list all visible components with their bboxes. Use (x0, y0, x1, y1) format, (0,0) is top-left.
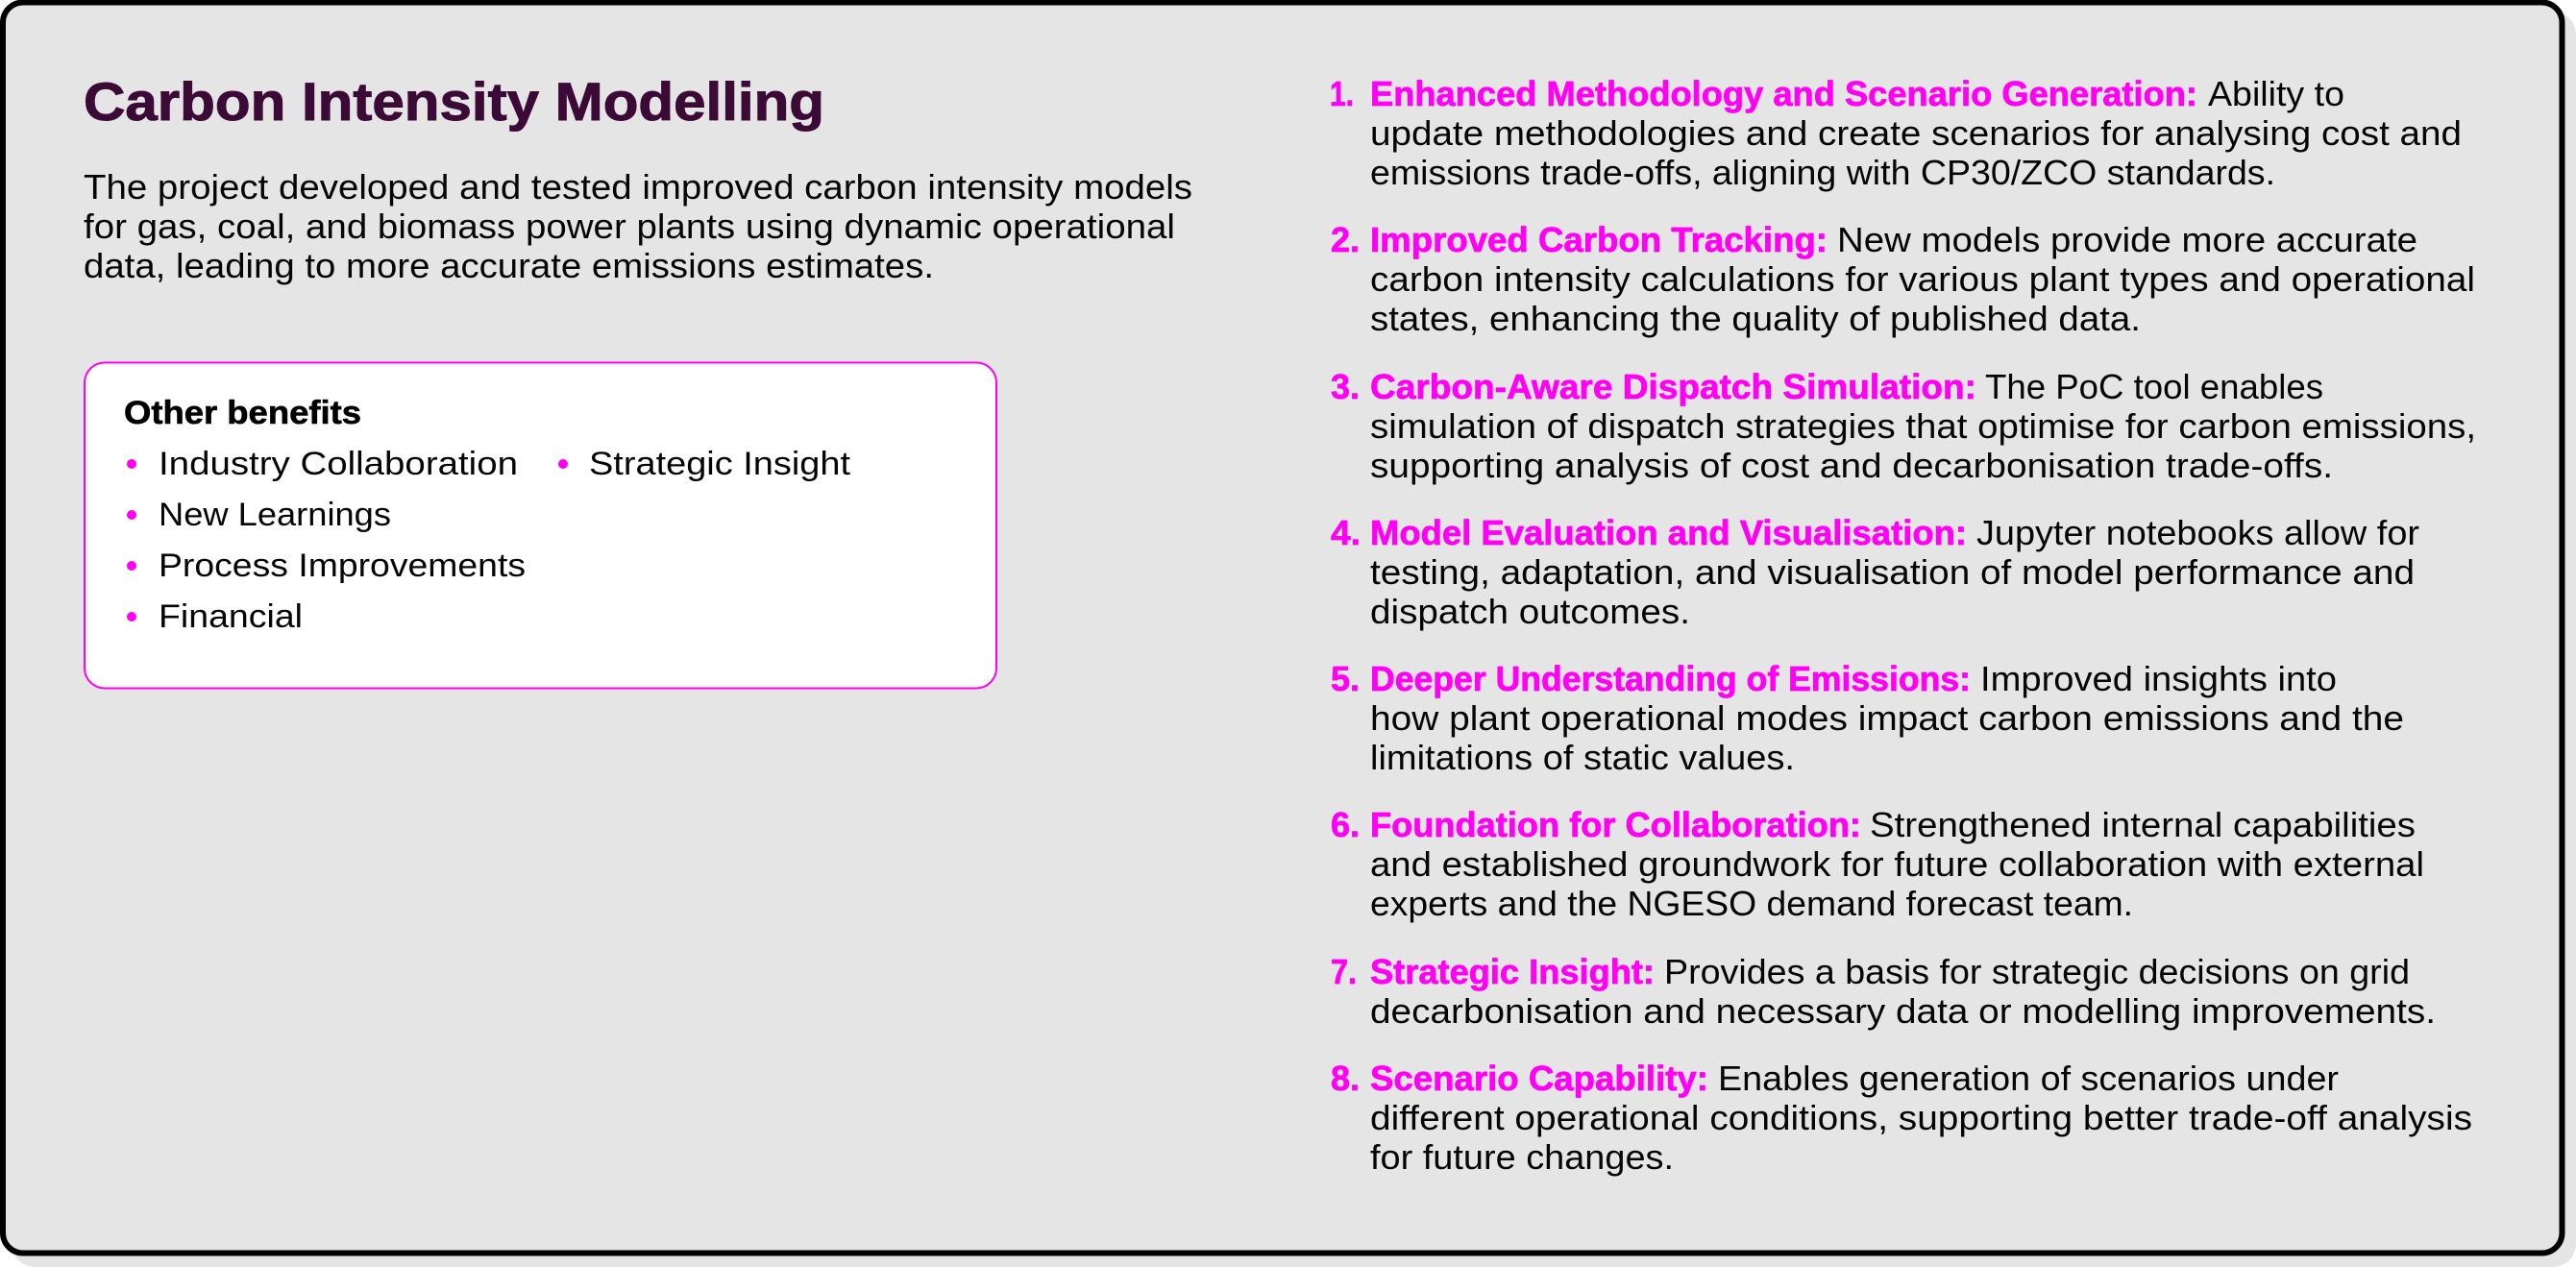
list item 3: 3. (1331, 367, 1360, 406)
list item 3: Carbon-Aware Dispatch Simulation: (1370, 367, 1976, 406)
list item 5: Improved insights into (1980, 659, 2337, 698)
list item 2: states, enhancing the quality of published data. (1370, 299, 2141, 338)
list item 3: The PoC tool enables (1985, 367, 2323, 406)
list item 5: Deeper Understanding of Emissions: (1370, 659, 1971, 698)
text block: project summary: The project developed and tested improved carbon intensity models (84, 167, 1192, 207)
list item 1: Ability to (2208, 74, 2344, 113)
list item 6: experts and the NGESO demand forecast team. (1370, 884, 2133, 923)
list item: process improvements: Process Improvements (159, 548, 526, 584)
list item 3: simulation of dispatch strategies that optimise for carbon emissions, (1370, 406, 2476, 446)
panel: numbered outcomes list (1330, 74, 2476, 1177)
panel: other benefits (85, 363, 996, 688)
list item 6 (1331, 805, 2424, 923)
list item 1: Enhanced Methodology and Scenario Generation: (1370, 74, 2197, 113)
list item 7: Provides a basis for strategic decisions on grid (1664, 952, 2410, 991)
list item 5: 5. (1331, 659, 1360, 698)
list item 2: Improved Carbon Tracking: (1370, 220, 1828, 259)
list item: strategic insight: Strategic Insight (589, 446, 851, 482)
list item 5: limitations of static values. (1370, 738, 1795, 777)
list item 4: dispatch outcomes. (1370, 592, 1690, 631)
list item 6: and established groundwork for future collaboration with external (1370, 844, 2424, 884)
list item 8: different operational conditions, supporting better trade-off analysis (1370, 1098, 2472, 1137)
heading: other benefits: Other benefits (124, 395, 361, 431)
text block: project summary (84, 167, 1192, 285)
list item 8: Enables generation of scenarios under (1718, 1059, 2339, 1098)
list item 4: Model Evaluation and Visualisation: (1370, 513, 1967, 552)
list item 3: supporting analysis of cost and decarbonisation trade-offs. (1370, 446, 2333, 485)
list item 8: for future changes. (1370, 1137, 1674, 1177)
list item 7: 7. (1331, 952, 1357, 991)
list item 4: Jupyter notebooks allow for (1976, 513, 2419, 552)
list item 6: 6. (1331, 805, 1360, 844)
list item 3 (1331, 367, 2476, 485)
list item: financial: Financial (159, 598, 303, 635)
list item 2: New models provide more accurate (1837, 220, 2417, 259)
list item 6: Foundation for Collaboration: (1370, 805, 1861, 844)
list item 6: Strengthened internal capabilities (1870, 805, 2416, 844)
title: Carbon Intensity Modelling (84, 71, 824, 132)
list item 8: 8. (1331, 1059, 1360, 1098)
list item: industry collaboration: Industry Collaboration (159, 446, 518, 482)
list item 2 (1331, 220, 2475, 338)
list item 8 (1331, 1059, 2472, 1177)
panel: left column (84, 71, 1192, 688)
text block: project summary: data, leading to more accurate emissions estimates. (84, 246, 934, 285)
list item 7 (1331, 952, 2436, 1031)
list item 4: testing, adaptation, and visualisation of model performance and (1370, 552, 2415, 592)
list item 1: emissions trade-offs, aligning with CP30/ZCO standards. (1370, 153, 2275, 192)
list item 7: decarbonisation and necessary data or modelling improvements. (1370, 991, 2436, 1031)
list item 5 (1331, 659, 2404, 777)
list item 2: carbon intensity calculations for various plant types and operational (1370, 259, 2475, 299)
list item 4: 4. (1331, 513, 1361, 552)
list item 1: update methodologies and create scenarios for analysing cost and (1370, 113, 2462, 153)
list item 8: Scenario Capability: (1370, 1059, 1708, 1098)
list item 7: Strategic Insight: (1370, 952, 1655, 991)
list item 5: how plant operational modes impact carbon emissions and the (1370, 698, 2404, 738)
text block: project summary: for gas, coal, and biomass power plants using dynamic operational (84, 207, 1175, 246)
list item 1: 1. (1330, 74, 1354, 113)
list item 2: 2. (1331, 220, 1360, 259)
list item 4 (1331, 513, 2419, 631)
list item 1 (1330, 74, 2462, 192)
list item: new learnings: New Learnings (159, 497, 391, 533)
